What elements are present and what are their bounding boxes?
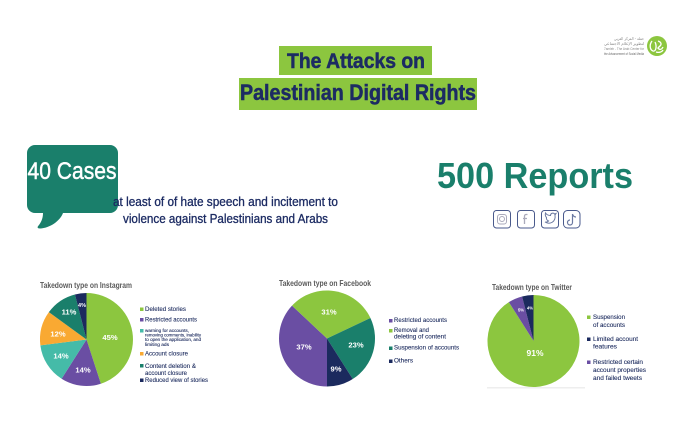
pie chart: facebook: 31% [321, 308, 337, 316]
legend: twitter: and failed tweets [593, 375, 643, 382]
pie chart: instagram: 45% [102, 333, 118, 342]
pie chart: facebook: 37% [296, 342, 312, 352]
heading: twitter: Takedown type on Twitter [492, 283, 573, 292]
title [239, 46, 477, 110]
panel: instagram chart [40, 281, 209, 386]
icon: tiktok [564, 210, 580, 228]
legend: instagram: account closure [145, 370, 187, 377]
legend: twitter: features [593, 344, 618, 350]
callout: 40 cases speech bubble [27, 145, 118, 228]
pie chart: instagram: 11% [62, 308, 77, 316]
pie chart: facebook: 23% [348, 340, 364, 350]
legend: facebook: Removal and [394, 327, 429, 334]
heading: facebook: Takedown type on Facebook [279, 279, 371, 288]
legend: facebook: deleting of content [394, 334, 446, 340]
pie chart: instagram [40, 293, 133, 386]
heading: instagram: Takedown type on Instagram [40, 281, 132, 290]
legend: instagram: Content deletion & [145, 363, 196, 370]
pie chart: instagram: 12% [50, 330, 66, 338]
pie chart: twitter: 91% [526, 348, 544, 358]
pie chart: twitter [487, 295, 579, 387]
pie chart: twitter: 4% [527, 306, 533, 310]
pie chart: instagram: 14% [53, 352, 69, 360]
icon: facebook [518, 210, 534, 228]
logo: حملة - المركز العربي [614, 36, 644, 41]
icon: instagram [494, 210, 510, 228]
logo: the Advancement of Social Media [604, 52, 645, 56]
logo: 7amleh - The Arab Center for [604, 47, 645, 51]
legend: twitter: Restricted certain [593, 359, 643, 366]
legend: facebook: Suspension of accounts [394, 344, 460, 352]
legend: twitter: of accounts [593, 322, 626, 329]
stat: 500 reports: 500 Reports [437, 155, 633, 196]
legend: instagram: warning for accounts, [145, 328, 189, 334]
legend: instagram: Account closure [145, 351, 188, 358]
legend: instagram: Restricted accounts [145, 316, 198, 324]
legend: instagram: Reduced view of stories [145, 377, 209, 384]
panel: twitter chart [487, 283, 647, 388]
legend: facebook: Others [394, 358, 414, 365]
legend: twitter: Suspension [593, 314, 625, 321]
icon: twitter [542, 210, 558, 228]
callout: 40 cases speech bubble: 40 Cases [28, 158, 116, 185]
text block: hate speech statement: violence against Palestinians and Arabs [123, 212, 328, 226]
pie chart: facebook: 9% [331, 364, 342, 374]
legend: instagram: removing comments, inability [145, 332, 202, 338]
legend: facebook: Restricted accounts [394, 317, 448, 324]
legend: twitter [587, 314, 647, 382]
icons: social platforms [494, 210, 580, 228]
pie chart: instagram: 14% [75, 366, 91, 374]
legend: facebook [389, 317, 460, 365]
pie chart: instagram: 4% [78, 303, 86, 309]
logo: لتطوير الإعلام الاجتماعي [604, 41, 644, 47]
panel: facebook chart [279, 279, 460, 386]
title: Palestinian Digital Rights [240, 80, 476, 105]
title: The Attacks on [287, 50, 425, 73]
legend: instagram: limiting ads [145, 342, 170, 348]
legend: instagram [140, 306, 209, 384]
legend: instagram: Deleted stories [145, 306, 187, 313]
legend: instagram: to open the application, and [145, 337, 201, 343]
logo [604, 36, 667, 56]
legend: twitter: account properties [593, 367, 647, 374]
text block: hate speech statement [113, 195, 338, 226]
text block: hate speech statement: at least of of hate speech and incitement to [113, 195, 338, 209]
pie chart: facebook [279, 290, 375, 386]
legend: twitter: Limited account [593, 336, 638, 343]
pie chart: twitter: 5% [518, 308, 524, 312]
